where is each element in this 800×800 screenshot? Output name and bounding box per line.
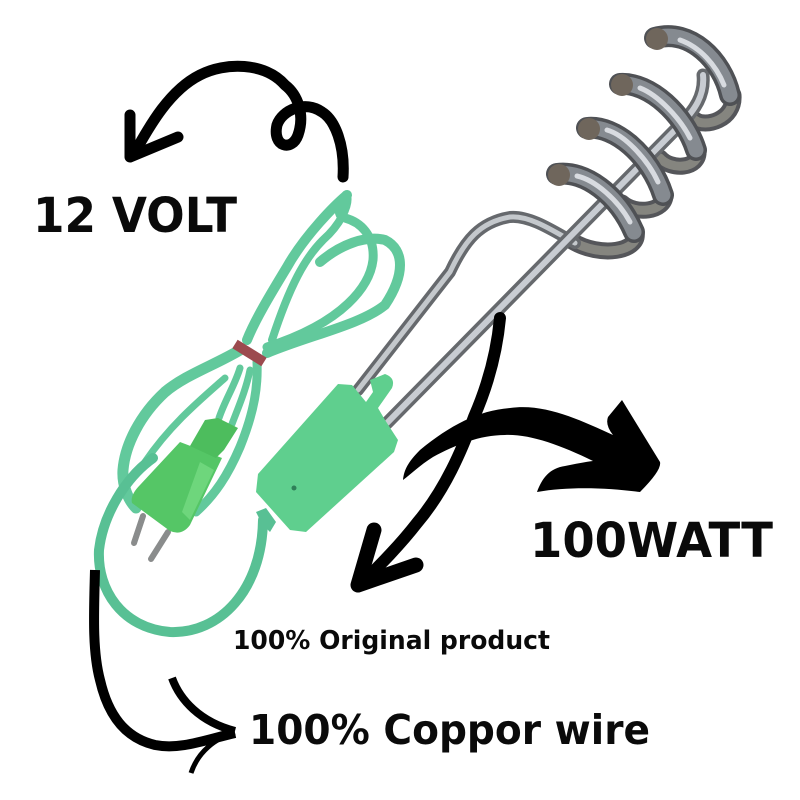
plug strain relief (190, 418, 238, 458)
arrow: to 100% Coppor wire (94, 570, 235, 773)
text: 100% Coppor wire: 100% Coppor wire (249, 706, 650, 754)
text: 100WATT: 100WATT (530, 513, 773, 569)
straight rod (387, 75, 703, 423)
text: 100% Original product: 100% Original product (233, 626, 550, 656)
plug pins (134, 516, 168, 559)
cable tie (235, 344, 264, 362)
arrow: to 100% Original product (358, 318, 500, 585)
arrow: to 12 VOLT label (130, 66, 343, 177)
text: 12 VOLT: 12 VOLT (33, 188, 237, 244)
cable collar (256, 508, 276, 532)
coil rear returns (572, 95, 733, 251)
icon: green plug with pins (132, 418, 238, 559)
icon: green power cable (99, 195, 400, 632)
icon: green heater handle (256, 374, 398, 532)
plug body (132, 442, 222, 533)
arrow: thick curved to 100WATT (403, 400, 660, 492)
icon: steel heating coil and rods (358, 28, 733, 423)
bent rod (358, 217, 575, 390)
coil front arcs (548, 28, 730, 232)
